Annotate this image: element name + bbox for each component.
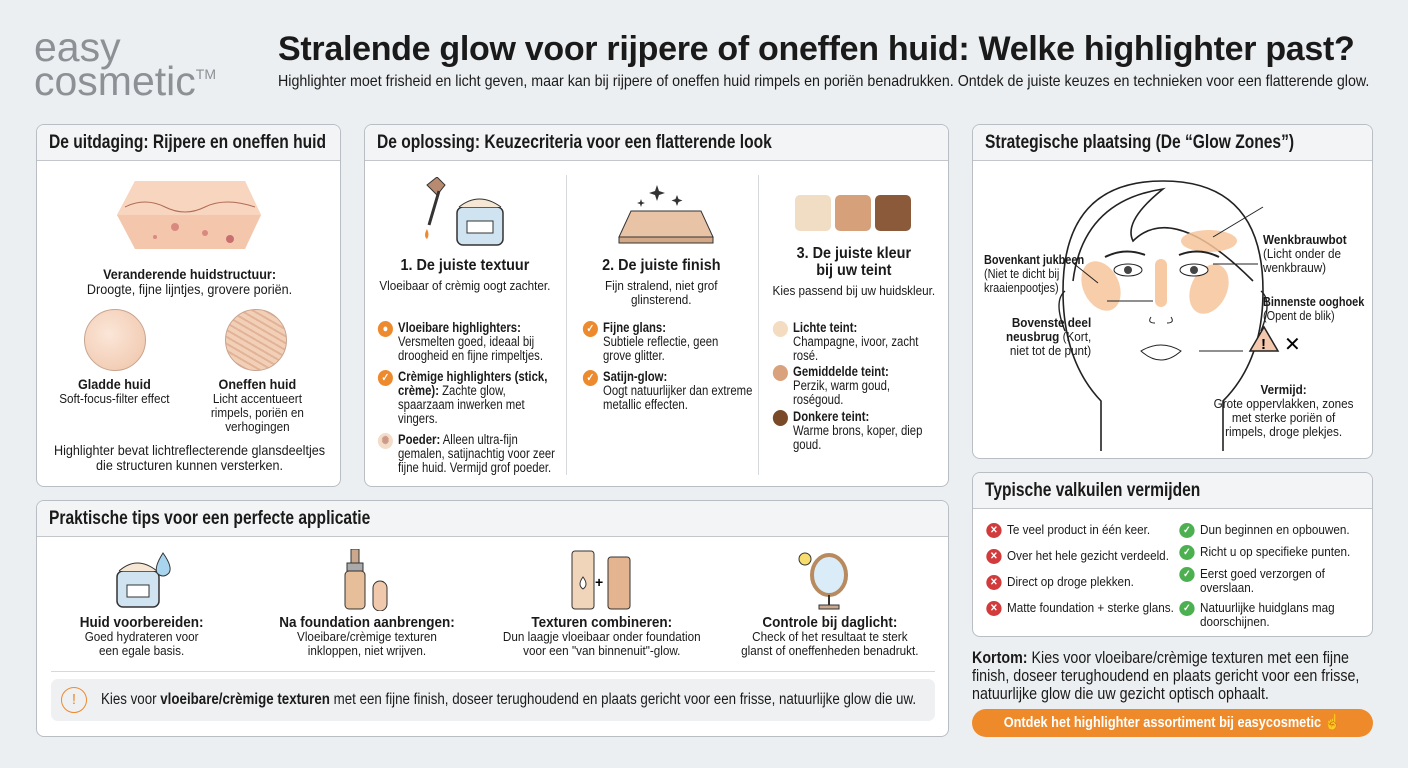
list: textuur: droogheid en fijne rimpeltjes. — [398, 348, 543, 363]
panel: valkuilen: ✕ — [990, 525, 998, 536]
panel: oplossing: Gemiddelde teint: — [793, 364, 889, 379]
list: do's: overslaan. — [1200, 580, 1254, 595]
label: vermijd: Vermijd: — [1261, 382, 1307, 397]
label: vermijd: rimpels, droge plekjes. — [1225, 424, 1342, 439]
icon: info: ! — [72, 691, 76, 708]
text: note: Highlighter bevat lichtreflecterende glansdeeltjes — [54, 442, 325, 458]
tip: na foundation — [279, 614, 455, 658]
label: ooghoek: Binnenste ooghoek — [1263, 294, 1364, 309]
text: huidstructuur: Droogte, fijne lijntjes, grovere poriën. — [87, 281, 292, 297]
text: oneffen huid: verhogingen — [225, 419, 290, 434]
heading: textuur — [379, 257, 550, 293]
face illustration: ✕ — [1284, 334, 1301, 356]
label: jukbeen: kraaienpootjes) — [984, 280, 1059, 295]
subtitle: Highlighter moet frisheid en licht geven, maar kan bij rijpere of oneffen huid rimpels en poriën benadrukken. Ontdek de juiste keuzes en technieken voor een flatterende glow. — [278, 73, 1369, 90]
text: gladde huid: Soft-focus-filter effect — [59, 391, 170, 406]
icon: colour swatches — [795, 195, 911, 231]
panel: oplossing: ● — [383, 323, 388, 335]
panel: oplossing: ✺ — [382, 435, 389, 447]
panel: oplossing: ✓ — [382, 372, 389, 384]
panel: valkuilen: ✕ — [990, 603, 998, 614]
panel: oplossing: Oogt natuurlijker dan extreme metallic effecten. — [603, 383, 752, 412]
icon: jar with drop — [116, 552, 171, 608]
panel: glow zones — [972, 124, 1373, 459]
label: vermijd — [1214, 382, 1354, 439]
tip: texturen: voor een "van binnenuit"-glow. — [523, 643, 680, 658]
label: vermijd: Grote oppervlakken, zones — [1214, 396, 1354, 411]
face illustration: ! — [1261, 336, 1266, 353]
list: finish: grove glitter. — [603, 348, 665, 363]
panel: uitdaging: De uitdaging: Rijpere en oneffen huid — [49, 132, 326, 153]
label: wenkbrauwbot: (Licht onder de — [1263, 246, 1341, 261]
text: kortom — [972, 648, 1359, 703]
icon: dropper and jar — [425, 177, 504, 246]
tip: na foundation: Na foundation aanbrengen: — [279, 614, 455, 631]
icon: mirror and sun — [798, 552, 848, 610]
list: don'ts — [986, 522, 1174, 616]
text: gladde huid — [59, 376, 170, 406]
panel: oplossing: De oplossing: Keuzecriteria voor een flatterende look — [377, 132, 772, 153]
text: note — [54, 442, 325, 473]
icon: tubes — [572, 550, 630, 610]
logo: easy — [34, 24, 121, 70]
label: neusbrug: niet tot de punt) — [1010, 343, 1091, 358]
tip: daglicht: Check of het resultaat te sterk — [752, 629, 908, 644]
list: kleur: Lichte teint: — [793, 320, 857, 335]
callout — [51, 679, 935, 721]
text: note: die structuren kunnen versterken. — [96, 457, 283, 473]
heading: finish: Fijn stralend, niet grof — [605, 278, 718, 293]
label: neusbrug: neusbrug (Kort, — [1006, 329, 1091, 344]
panel: valkuilen: ✓ — [1183, 569, 1191, 580]
panel: tips: Praktische tips voor een perfecte applicatie — [49, 508, 370, 529]
panel: oplossing: Crèmige highlighters (stick, crème): Zachte glow, spaarzaam inwerken met vingers. — [398, 369, 547, 426]
label: neusbrug — [1006, 315, 1091, 358]
panel: glow zones: Strategische plaatsing (De “Glow Zones”) — [985, 132, 1294, 153]
logo — [34, 24, 216, 104]
list: do's: Richt u op specifieke punten. — [1200, 544, 1350, 559]
panel: oplossing — [364, 124, 949, 487]
panel: oplossing: goud. — [793, 437, 821, 452]
list: kleur: Champagne, ivoor, zacht — [793, 334, 918, 349]
list: do's: Dun beginnen en opbouwen. — [1200, 522, 1350, 537]
tip: texturen: Texturen combineren: — [531, 614, 672, 631]
panel: uitdaging — [36, 124, 341, 487]
text: gladde huid: Gladde huid — [78, 376, 151, 392]
list: don'ts: Te veel product in één keer. — [1007, 522, 1150, 537]
panel: valkuilen: ✕ — [990, 577, 998, 588]
list: kleur — [772, 320, 918, 363]
panel: valkuilen — [972, 472, 1373, 637]
tip: texturen: Dun laagje vloeibaar onder foundation — [503, 629, 701, 644]
label: ooghoek — [1263, 294, 1364, 323]
list: finish — [582, 320, 718, 363]
button: cta: Ontdek het highlighter assortiment bij easycosmetic ☝ — [1004, 714, 1341, 731]
tip: huid voorbereiden: een egale basis. — [99, 643, 184, 658]
list: textuur: Versmelten goed, ideaal bij — [398, 334, 534, 349]
panel: oplossing: Poeder: Alleen ultra-fijn — [398, 432, 518, 447]
panel: valkuilen: ✕ — [990, 551, 998, 562]
heading: finish: 2. De juiste finish — [602, 257, 721, 274]
label: jukbeen: Bovenkant jukbeen — [984, 252, 1084, 267]
heading: finish: glinsterend. — [631, 292, 692, 307]
tip: daglicht — [741, 614, 919, 658]
panel: oplossing: Perzik, warm goud, — [793, 378, 890, 393]
icon: skin cross-section — [117, 181, 261, 249]
text: oneffen huid — [211, 376, 304, 434]
icon: gladde huid — [84, 309, 146, 371]
icon: finish palette — [618, 185, 714, 244]
logo: cosmeticTM — [34, 58, 216, 104]
list: finish: Subtiele reflectie, geen — [603, 334, 718, 349]
label: wenkbrauwbot — [1263, 232, 1347, 275]
panel: oplossing: ✓ — [587, 372, 594, 384]
panel: oplossing: ✓ — [587, 323, 594, 335]
label: vermijd: met sterke poriën of — [1232, 410, 1335, 425]
panel: oplossing: fijne huid. Vermijd grof poeder. — [398, 460, 551, 475]
panel: valkuilen: ✓ — [1183, 525, 1191, 536]
text: kortom: natuurlijke glow die uw gezicht optisch ophaalt. — [972, 684, 1269, 703]
panel: valkuilen: ✓ — [1183, 547, 1191, 558]
text: oneffen huid: Licht accentueert — [213, 391, 302, 406]
list: finish: Fijne glans: — [603, 320, 666, 335]
label: ooghoek: (Opent de blik) — [1263, 308, 1335, 323]
label: wenkbrauwbot: wenkbrauw) — [1263, 260, 1326, 275]
icon: oneffen huid — [225, 309, 287, 371]
list: textuur — [378, 320, 543, 363]
panel: valkuilen: ✓ — [1183, 603, 1191, 614]
tip: huid voorbereiden: Huid voorbereiden: — [80, 614, 203, 631]
list: don'ts: Matte foundation + sterke glans. — [1007, 600, 1174, 615]
tip: huid voorbereiden — [80, 614, 203, 658]
tip: na foundation: Vloeibare/crèmige texturen — [297, 629, 437, 644]
panel: oplossing: Donkere teint: — [793, 409, 869, 424]
label: jukbeen: (Niet te dicht bij — [984, 266, 1059, 281]
tip: na foundation: inkloppen, niet wrijven. — [308, 643, 426, 658]
text: oneffen huid: rimpels, poriën en — [211, 405, 304, 420]
panel: valkuilen: Typische valkuilen vermijden — [985, 480, 1200, 501]
text: kortom: finish, doseer terughoudend en plaats gericht voor een frisse, — [972, 666, 1359, 685]
heading: finish — [602, 257, 721, 307]
text: huidstructuur — [87, 266, 292, 297]
icon: info — [61, 687, 87, 713]
list: do's: Eerst goed verzorgen of — [1200, 566, 1325, 581]
heading: kleur — [773, 245, 935, 298]
button: cta — [972, 709, 1373, 737]
face illustration — [1058, 180, 1301, 451]
title: Stralende glow voor rijpere of oneffen huid: Welke highlighter past? — [278, 30, 1355, 68]
panel: oplossing: roségoud. — [793, 392, 843, 407]
heading: kleur: bij uw teint — [816, 262, 891, 279]
callout: Kies voor vloeibare/crèmige texturen met een fijne finish, doseer terughoudend en plaats gericht voor een frisse, natuurlijke glow die uw. — [101, 691, 916, 708]
panel: tips — [36, 500, 949, 737]
label: wenkbrauwbot: Wenkbrauwbot — [1263, 232, 1347, 247]
label: neusbrug: Bovenste deel — [1012, 315, 1091, 330]
heading: textuur: 1. De juiste textuur — [400, 257, 529, 274]
label: jukbeen — [984, 252, 1084, 295]
tip: daglicht: Controle bij daglicht: — [762, 614, 897, 631]
list: do's: Natuurlijke huidglans mag — [1200, 600, 1335, 615]
list: do's — [1179, 522, 1350, 629]
tip: texturen — [503, 614, 701, 658]
list: don'ts: Direct op droge plekken. — [1007, 574, 1134, 589]
text: kortom: Kortom: Kies voor vloeibare/crèmige texturen met een fijne — [972, 648, 1349, 667]
text: huidstructuur: Veranderende huidstructuur: — [103, 266, 276, 282]
tip: huid voorbereiden: Goed hydrateren voor — [85, 629, 199, 644]
icon: foundation — [344, 549, 388, 611]
text: oneffen huid: Oneffen huid — [219, 376, 296, 392]
heading: kleur: Kies passend bij uw huidskleur. — [773, 283, 935, 298]
list: textuur: Vloeibare highlighters: — [398, 320, 521, 335]
panel: oplossing: Satijn-glow: — [603, 369, 667, 384]
icon: tubes: + — [595, 574, 603, 590]
heading: kleur: 3. De juiste kleur — [797, 245, 911, 262]
list: kleur: rosé. — [793, 348, 818, 363]
list: do's: doorschijnen. — [1200, 614, 1270, 629]
heading: textuur: Vloeibaar of crèmig oogt zachter. — [379, 278, 550, 293]
tip: daglicht: glanst of oneffenheden benadrukt. — [741, 643, 919, 658]
panel: oplossing: gemalen, satijnachtig voor zeer — [398, 446, 555, 461]
list: don'ts: Over het hele gezicht verdeeld. — [1007, 548, 1169, 563]
panel: oplossing: Warme brons, koper, diep — [793, 423, 922, 438]
